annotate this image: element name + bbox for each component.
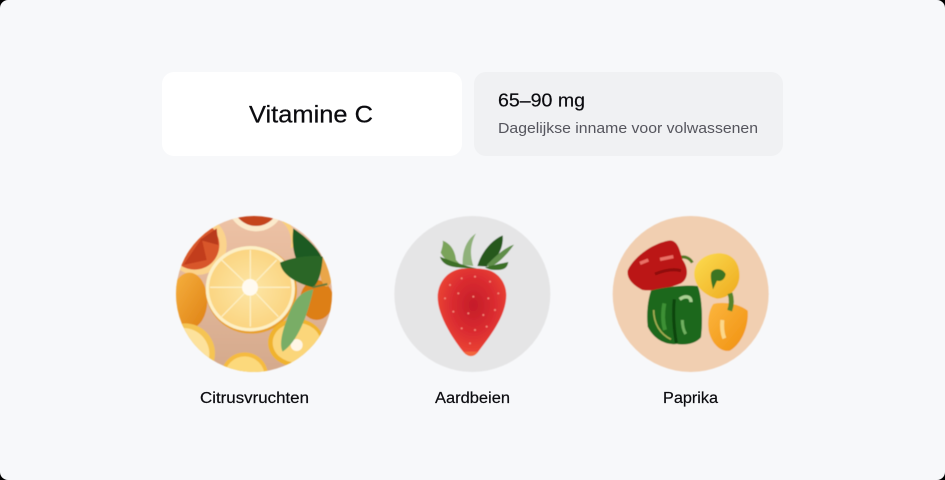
panel: title card	[162, 72, 462, 156]
item: strawberries	[394, 216, 550, 407]
item: citrus fruits	[175, 215, 333, 404]
lemon bottom left	[182, 323, 216, 361]
strawberry leaves	[440, 233, 514, 270]
yellow pepper	[694, 253, 739, 299]
orange left	[175, 272, 208, 326]
intake amount: 65–90 mg	[498, 90, 585, 110]
green pepper	[647, 286, 702, 344]
lemon bottom middle	[223, 352, 268, 372]
photo: bell peppers	[613, 216, 769, 372]
orange right	[300, 280, 333, 320]
label: bell peppers: Paprika	[663, 390, 718, 407]
intake description: Dagelijkse inname voor volwassenen	[498, 120, 758, 137]
title: Vitamine C	[249, 102, 373, 128]
label: strawberries: Aardbeien	[435, 390, 510, 407]
leaf middle	[280, 256, 323, 287]
red pepper	[628, 240, 692, 290]
leaf lower	[281, 289, 313, 352]
panel: daily intake card	[474, 72, 783, 156]
photo: citrus fruits	[175, 215, 333, 373]
item: bell peppers	[613, 216, 769, 407]
leaf top	[293, 228, 323, 260]
blood orange top	[232, 218, 278, 232]
label: citrus fruits: Citrusvruchten	[200, 390, 309, 407]
photo: strawberry	[394, 216, 550, 372]
blood orange left	[180, 224, 227, 276]
orange pepper	[708, 293, 748, 351]
lemon bottom right	[268, 319, 324, 367]
big lemon	[206, 246, 297, 334]
strawberry body	[438, 268, 506, 358]
slice top right	[282, 221, 294, 248]
